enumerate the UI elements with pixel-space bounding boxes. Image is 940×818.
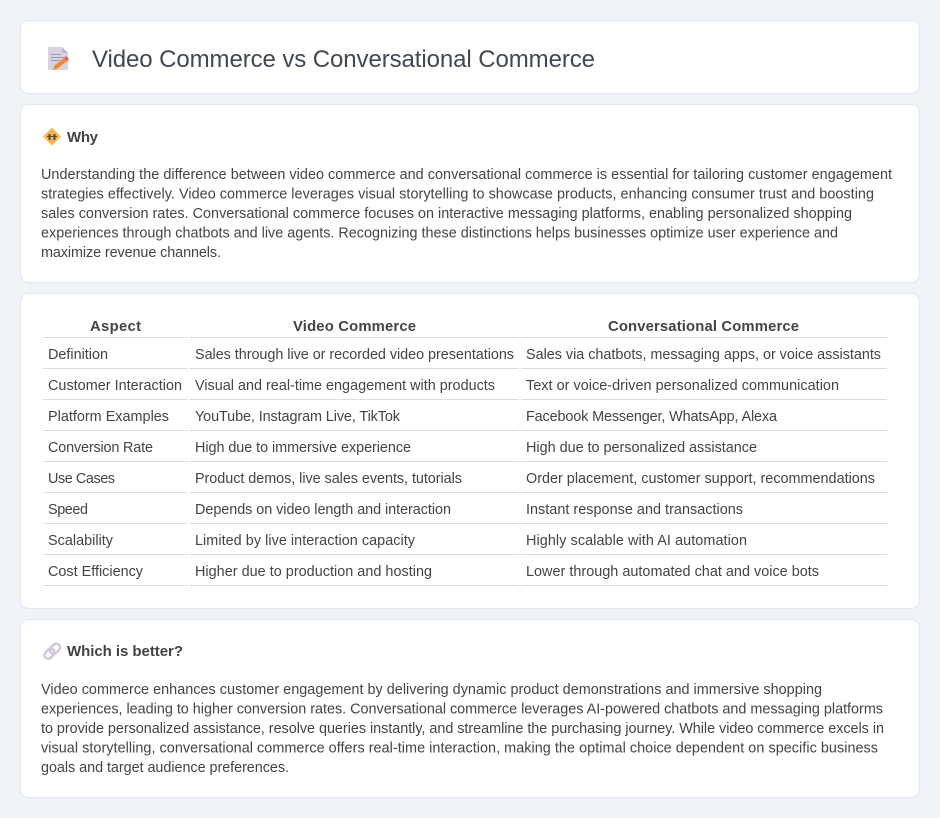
row: use cases: Product demos, live sales events, tutorials <box>195 471 462 487</box>
row: customer interaction: Text or voice-driven personalized communication <box>526 378 839 394</box>
icon: document with pencil <box>48 47 69 70</box>
row: conversion rate <box>48 440 757 456</box>
heading: why: Why <box>67 129 99 146</box>
row: cost efficiency: Higher due to production and hosting <box>195 564 432 580</box>
row: speed: Speed <box>48 502 88 518</box>
row: platform examples: Facebook Messenger, WhatsApp, Alexa <box>526 409 777 425</box>
table header row: Video Commerce <box>293 319 416 335</box>
text block: which is better paragraph: goals and target audience preferences. <box>41 760 289 776</box>
row: cost efficiency <box>48 564 819 580</box>
row: use cases: Order placement, customer support, recommendations <box>526 471 875 487</box>
row: cost efficiency: Cost Efficiency <box>48 564 144 580</box>
panel: comparison table <box>20 294 920 608</box>
table header row: Aspect <box>90 319 141 335</box>
text block: which is better paragraph <box>41 682 884 776</box>
row: conversion rate: High due to immersive experience <box>195 440 411 456</box>
row: definition: Sales through live or recorded video presentations <box>195 347 514 363</box>
row: use cases: Use Cases <box>48 471 115 487</box>
row: conversion rate: High due to personalized assistance <box>526 440 757 456</box>
text block: why paragraph: experiences through chatbots and live agents. Recognizing these distinctions helps businesses optimize user experience and <box>41 226 838 242</box>
text block: why paragraph <box>41 167 892 261</box>
row: platform examples: Platform Examples <box>48 409 169 425</box>
text block: why paragraph: maximize revenue channels. <box>41 245 221 261</box>
row: platform examples: YouTube, Instagram Live, TikTok <box>195 409 401 425</box>
panel: why <box>20 104 920 282</box>
text block: why paragraph: strategies effectively. Video commerce leverages visual storytelling to showcase products, enhancing consumer trust and boosting <box>41 186 874 202</box>
text block: which is better paragraph: Video commerce enhances customer engagement by delivering dynamic product demonstrations and immersive shopping <box>41 682 822 698</box>
row: definition <box>48 347 881 363</box>
row: customer interaction: Customer Interaction <box>48 378 182 394</box>
heading: which is better: Which is better? <box>67 643 183 660</box>
panel: header <box>20 20 920 94</box>
table header row: Conversational Commerce <box>608 319 799 335</box>
row: scalability <box>48 533 747 549</box>
row: cost efficiency: Lower through automated chat and voice bots <box>526 564 819 580</box>
row: use cases <box>48 471 875 487</box>
row: scalability: Limited by live interaction capacity <box>195 533 416 549</box>
row: speed: Depends on video length and interaction <box>195 502 451 518</box>
title: Video Commerce vs Conversational Commerce <box>92 46 595 73</box>
row: scalability: Highly scalable with AI automation <box>526 533 747 549</box>
row: conversion rate: Conversion Rate <box>48 440 153 456</box>
text block: why paragraph: sales conversion rates. Conversational commerce focuses on interactive messaging platforms, enabling personalized shopping <box>41 206 852 222</box>
row: customer interaction <box>48 378 839 394</box>
row: definition: Definition <box>48 347 108 363</box>
row: definition: Sales via chatbots, messaging apps, or voice assistants <box>526 347 881 363</box>
row: scalability: Scalability <box>48 533 114 549</box>
icon: road sign diamond <box>44 128 60 145</box>
table header row <box>90 319 799 335</box>
row: speed: Instant response and transactions <box>526 502 743 518</box>
text block: why paragraph: Understanding the difference between video commerce and conversational commerce is essential for tailoring customer engagement <box>41 167 892 183</box>
row: customer interaction: Visual and real-time engagement with products <box>195 378 495 394</box>
text block: which is better paragraph: to provide personalized assistance, resolve queries instantly, and streamline the purchasing journey. While video commerce excels in <box>41 721 884 737</box>
icon: link <box>43 642 62 660</box>
panel: which is better <box>20 620 920 798</box>
row: speed <box>48 502 743 518</box>
row: platform examples <box>48 409 777 425</box>
text block: which is better paragraph: experiences, leading to higher conversion rates. Conversational commerce leverages AI-powered chatbots and messaging platforms <box>41 702 883 718</box>
text block: which is better paragraph: visual storytelling, conversational commerce offers real-time interaction, making the optimal choice dependent on specific business <box>41 740 878 756</box>
